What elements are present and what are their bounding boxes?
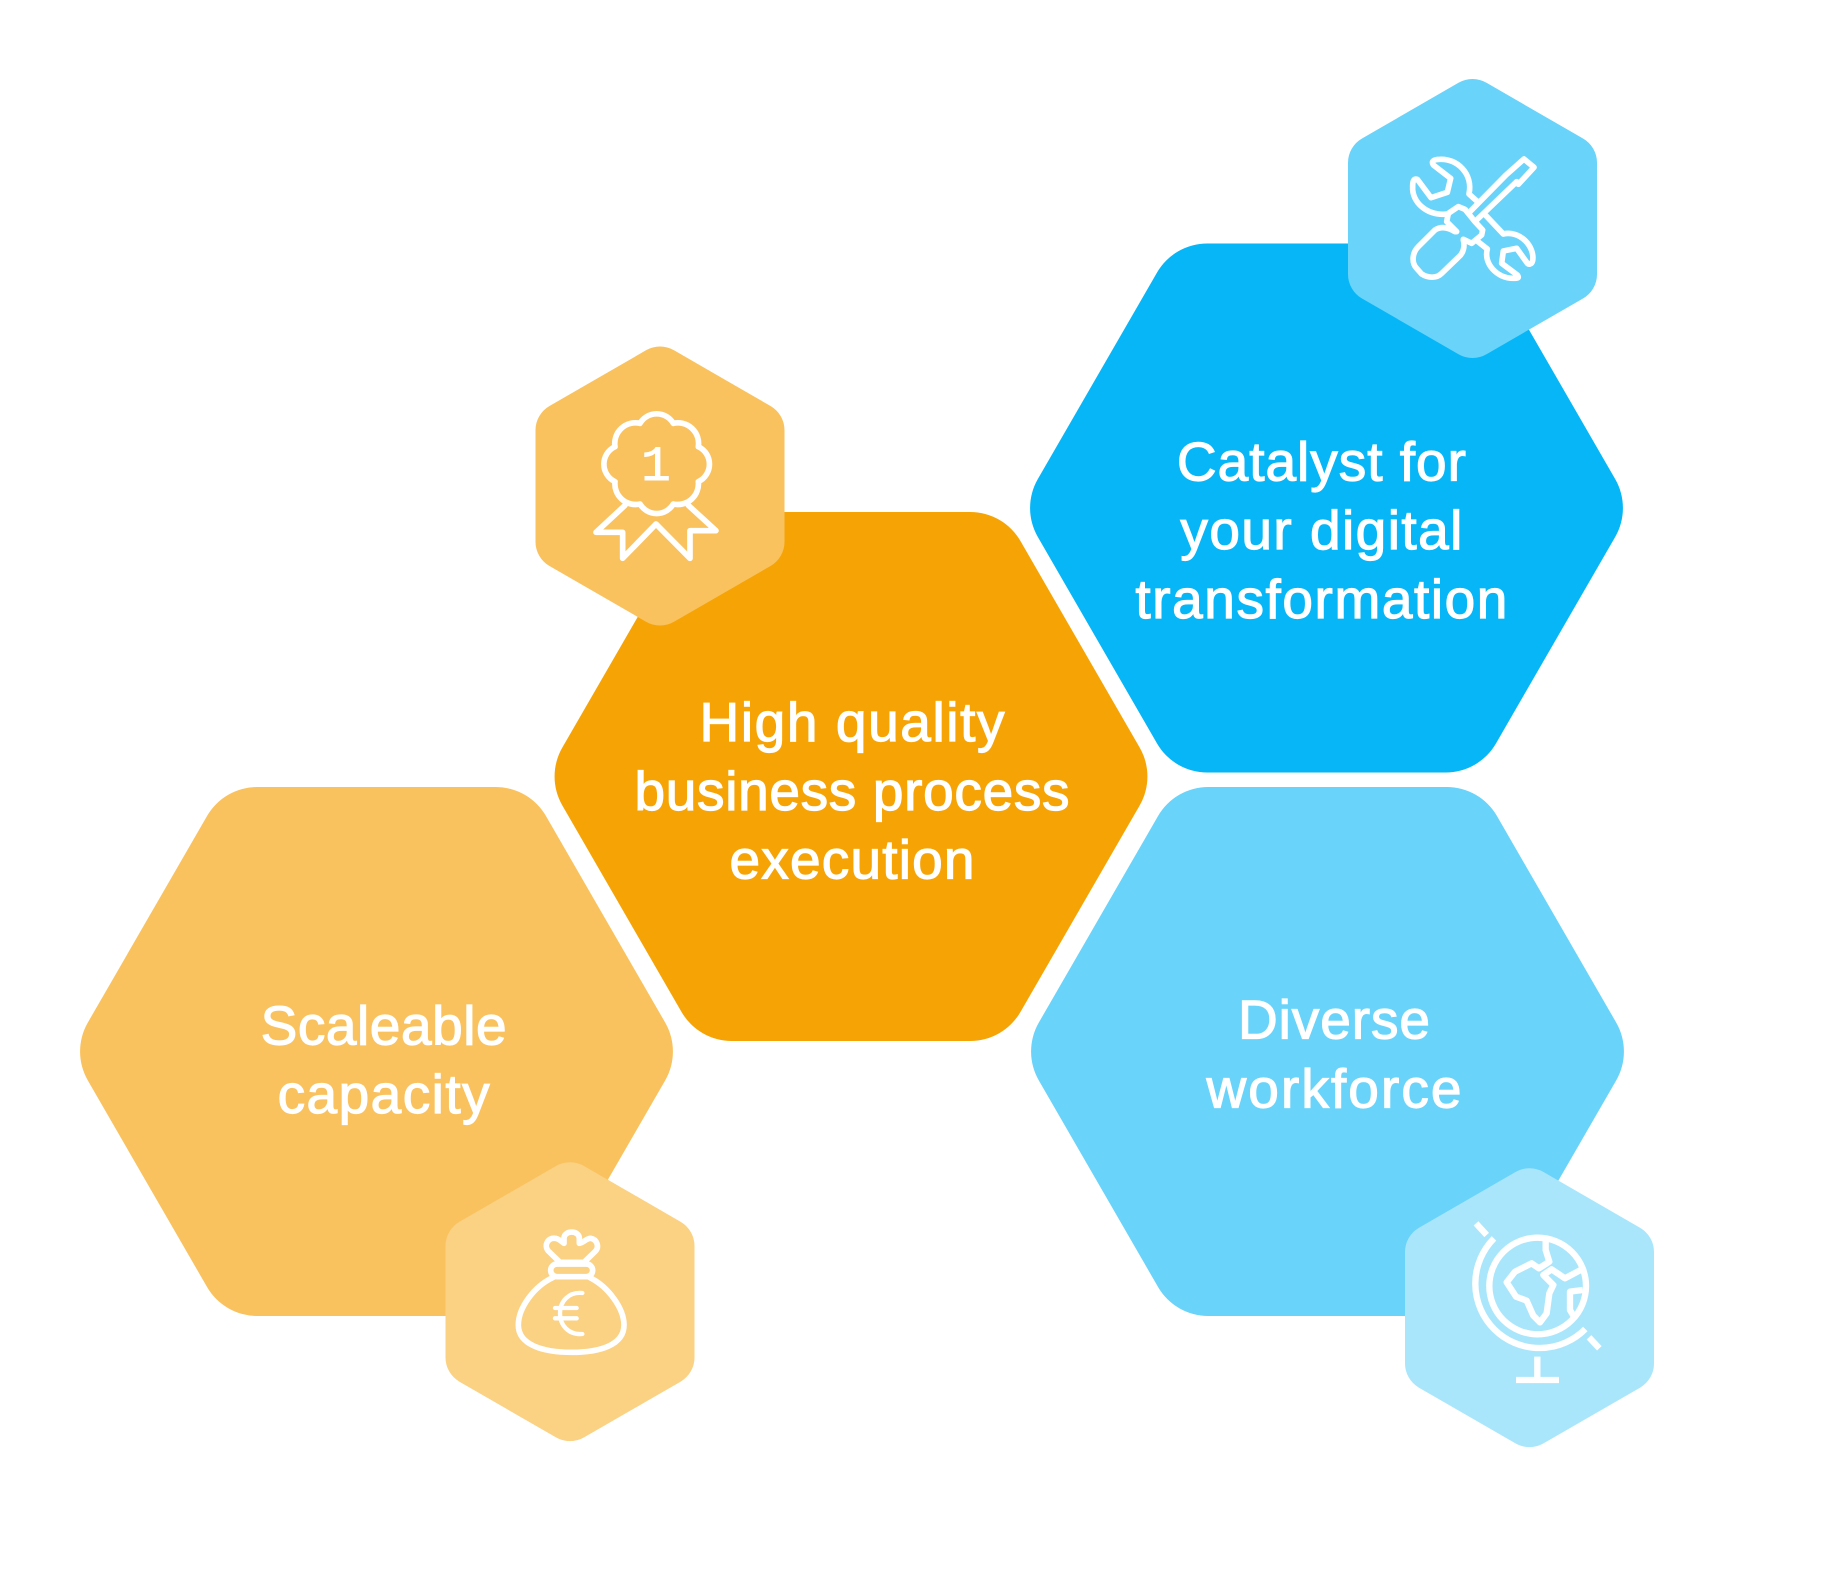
text: diverse workforce: Diverse — [1238, 988, 1430, 1050]
text: catalyst: Catalyst for — [1177, 430, 1466, 492]
panel: catalyst for digital transformation — [1030, 244, 1623, 772]
badge: medal — [535, 347, 784, 625]
hexagon: diverse workforce — [1031, 787, 1624, 1316]
hexagon: high quality — [555, 512, 1147, 1041]
panel: high quality business process execution — [555, 512, 1147, 1041]
small hexagon: tools — [1348, 79, 1597, 358]
icon: medal rosette — [596, 414, 716, 558]
badge: globe — [1405, 1168, 1654, 1447]
text: catalyst: transformation — [1135, 568, 1507, 630]
icon: wrench and screwdriver — [1413, 159, 1534, 278]
hexagon: scaleable capacity — [80, 787, 673, 1316]
text: catalyst: your digital — [1180, 499, 1462, 561]
panel: scaleable capacity — [80, 787, 673, 1316]
badge: tools — [1348, 79, 1597, 358]
icon: money bag with euro — [518, 1232, 624, 1352]
badge: money bag — [445, 1162, 694, 1441]
text: scaleable capacity: Scaleable — [261, 994, 507, 1056]
small hexagon: globe — [1405, 1168, 1654, 1447]
text: diverse workforce: workforce — [1206, 1058, 1462, 1120]
icon: number 1: 1 — [641, 439, 671, 495]
small hexagon: money bag — [445, 1162, 695, 1441]
text: high quality: High quality — [700, 691, 1005, 753]
panel: diverse workforce — [1031, 787, 1624, 1316]
hexagon: catalyst — [1030, 244, 1623, 772]
text: high quality: execution — [730, 828, 974, 890]
icon: globe on stand — [1475, 1223, 1599, 1380]
small hexagon: medal — [535, 347, 785, 625]
text: scaleable capacity: capacity — [278, 1063, 490, 1125]
text: high quality: business process — [634, 760, 1070, 822]
